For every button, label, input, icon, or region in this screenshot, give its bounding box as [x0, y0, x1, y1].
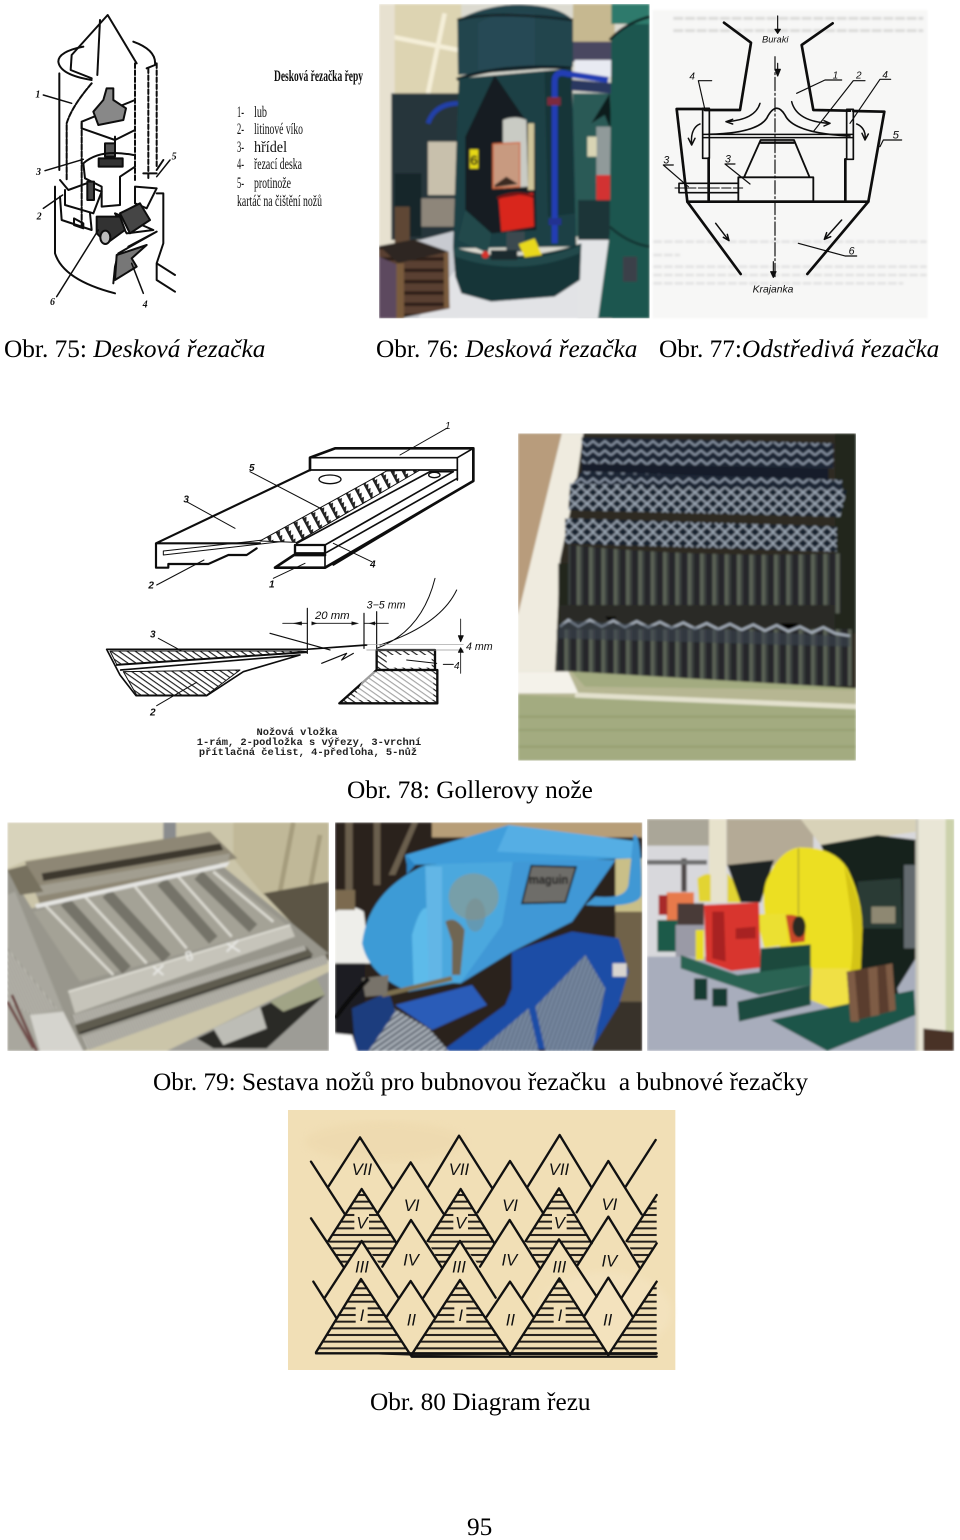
Roman numeral labels: II — [407, 1311, 416, 1330]
caption: Obr. 80: Obr. 80 Diagram řezu — [370, 1388, 591, 1416]
diagram legend: Nožová vložka — [197, 727, 421, 759]
caption row: Obr. 75 to 77 — [4, 335, 939, 363]
caption: Obr. 78: Obr. 78: Gollerovy nože — [347, 776, 593, 804]
green base — [758, 943, 812, 974]
Roman numeral labels: I — [558, 1306, 563, 1325]
legend: Desková řezačka řepy: protinože — [254, 175, 291, 192]
blue pipe — [555, 73, 608, 243]
hopper — [362, 865, 460, 992]
Roman numeral labels: III — [552, 1257, 567, 1276]
diagram legend: Nožová vložka: Nožová vložka — [256, 727, 338, 739]
panel: Obr. 80 cutting diagram — [288, 1110, 675, 1370]
drawing labels: Krajanka — [753, 284, 794, 295]
hatched triangles — [316, 1188, 657, 1356]
dimension and part labels — [147, 421, 493, 719]
dimension and part labels: 3 — [183, 494, 189, 505]
Roman numeral labels: IV — [501, 1251, 519, 1270]
vertical knife faces — [568, 545, 840, 613]
Roman numeral labels: VII — [449, 1160, 470, 1179]
Roman numeral labels: VI — [601, 1195, 618, 1214]
Roman numeral labels: V — [356, 1213, 369, 1232]
nameplate — [522, 866, 576, 903]
panel: Obr. 75 cutaway diagram of the plate slicer with legend — [35, 15, 177, 310]
right pillar — [914, 819, 946, 1051]
photo: Obr. 78 Goller knives — [518, 433, 856, 761]
caption row: Obr. 75 to 77: Obr. 76: Desková řezačka — [376, 335, 637, 363]
dimension and part labels: 4 — [369, 560, 376, 571]
callout numbers on the cutaway — [35, 89, 177, 310]
diagram legend: Nožová vložka: přítlačná čelist, 4-předloha, 5-nůž — [199, 747, 417, 759]
aged paper background — [288, 1110, 675, 1370]
legend: Desková řezačka řepy: 3- — [237, 139, 244, 156]
Roman numeral labels: I — [360, 1306, 365, 1325]
dimension and part labels: 4 mm — [466, 641, 493, 653]
drawing labels: 1 — [833, 71, 838, 82]
label gaps on hatching — [354, 1213, 567, 1326]
legend: Desková řezačka řepy: lub — [254, 104, 267, 121]
photo: Obr. 76 plate slicer tower: 6 — [470, 152, 478, 168]
Roman numeral labels: VII — [352, 1160, 373, 1179]
zigzag knife rows — [582, 437, 833, 468]
callout numbers on the cutaway: 2 — [36, 211, 42, 222]
panel: Obr. 78 knife insert diagram — [107, 421, 493, 719]
dimension and part labels: 5 — [249, 463, 255, 474]
wooden frame — [518, 672, 856, 761]
housing — [821, 835, 918, 1015]
Roman numeral labels: V — [554, 1213, 567, 1232]
Roman numeral labels: I — [458, 1306, 463, 1325]
legend: Desková řezačka řepy: 4- — [237, 156, 244, 173]
dimension and part labels: 2 — [149, 708, 156, 719]
panel: Obr. 77 centrifugal slicer diagram — [653, 10, 928, 318]
caption row: Obr. 75 to 77: Obr. 75: Desková řezačka — [4, 335, 265, 363]
scan background with faint text — [653, 10, 928, 318]
dimension and part labels: 1 — [445, 421, 451, 432]
photo: Obr. 79 blue drum slicer — [335, 822, 642, 1051]
Roman numeral labels: IV — [601, 1251, 619, 1270]
Roman numeral labels: VII — [549, 1160, 570, 1179]
drawing labels: 6 — [849, 245, 855, 257]
Roman numeral labels: IV — [403, 1251, 421, 1270]
rust speckle — [449, 873, 499, 920]
callout numbers on the cutaway: 5 — [172, 151, 177, 162]
Roman numeral labels: VI — [404, 1196, 420, 1215]
slicer section drawing — [663, 16, 902, 277]
red gearbox — [704, 902, 761, 971]
legend: Desková řezačka řepy: litinové víko — [254, 121, 303, 138]
top bar — [25, 832, 237, 905]
pallet — [848, 963, 890, 1020]
drawing labels: 5 — [893, 130, 900, 142]
dimension and part labels: 2 — [147, 580, 154, 591]
number plate — [470, 149, 478, 169]
diagram legend: Nožová vložka: 1-rám, 2-podložka s výřezy, 3-vrchní — [197, 737, 421, 749]
drawing: slicer cutaway — [43, 15, 175, 297]
yellow disc — [764, 847, 862, 1015]
drawing labels: 2 — [855, 71, 862, 82]
dimension and part labels: 4 — [454, 661, 460, 672]
crate — [379, 240, 450, 318]
Roman numeral labels: III — [452, 1257, 466, 1276]
legend: Desková řezačka řepy: Desková řezačka řepy — [274, 68, 363, 85]
photo: Obr. 79 yellow drum slicer — [647, 819, 954, 1051]
dimension and part labels: 20 mm — [314, 610, 350, 622]
callout numbers on the cutaway: 6 — [50, 297, 55, 308]
drawing labels: 4 — [689, 71, 695, 82]
legend: Desková řezačka řepy: hřídel — [254, 139, 287, 156]
callout numbers on the cutaway: 1 — [35, 89, 40, 100]
dimension and part labels: 3 — [150, 630, 156, 641]
drawing labels: 3 — [725, 154, 731, 166]
legend: Desková řezačka řepy: 1- — [237, 104, 244, 121]
photo: Obr. 79 knife assembly — [7, 822, 329, 1051]
callout numbers on the cutaway: 4 — [142, 299, 148, 310]
drawing labels: 4 — [882, 70, 888, 81]
legend: Desková řezačka řepy: 5- — [237, 175, 244, 192]
caption row: Obr. 75 to 77: Obr. 77:Odstředivá řezačka — [659, 335, 939, 363]
cut pattern lines — [311, 1135, 657, 1357]
right tank — [598, 18, 650, 318]
Roman numeral labels: II — [506, 1311, 515, 1330]
Roman numeral labels: V — [455, 1213, 468, 1232]
lower clamps — [197, 988, 325, 1048]
Roman numeral labels: II — [603, 1311, 613, 1330]
dimension and part labels: 3−5 mm — [367, 599, 406, 611]
legend: Desková řezačka řepy — [237, 68, 363, 210]
Roman numeral labels: VI — [502, 1196, 518, 1215]
base — [453, 243, 581, 302]
Roman numeral labels: III — [355, 1257, 369, 1276]
perspective view of knife — [156, 428, 473, 585]
drawing labels: 3 — [663, 154, 669, 166]
photo: Obr. 79 knife assembly: 8 — [183, 947, 195, 965]
legend: Desková řezačka řepy: řezací deska — [254, 156, 302, 173]
legend: Desková řezačka řepy: 2- — [237, 121, 244, 138]
caption: Obr. 79: Obr. 79: Sestava nožů pro bubnovou řezačku a bubnové řezačky — [153, 1068, 808, 1096]
dimension and part labels: 1 — [269, 580, 275, 591]
drawing labels: Buraki — [762, 35, 789, 45]
photo: Obr. 79 blue drum slicer: maguin — [529, 873, 568, 887]
left comb — [8, 892, 63, 1051]
knife frame — [7, 858, 328, 1051]
motors — [442, 932, 629, 1051]
photo: Obr. 76 plate slicer tower — [379, 4, 650, 320]
Roman numeral labels — [352, 1160, 619, 1330]
hatch opening — [465, 75, 536, 233]
drawing labels — [663, 35, 900, 295]
cross-section of knife — [107, 578, 463, 706]
callout numbers on the cutaway: 3 — [35, 167, 41, 178]
legend: Desková řezačka řepy: kartáč na čištění nožů — [237, 193, 322, 210]
